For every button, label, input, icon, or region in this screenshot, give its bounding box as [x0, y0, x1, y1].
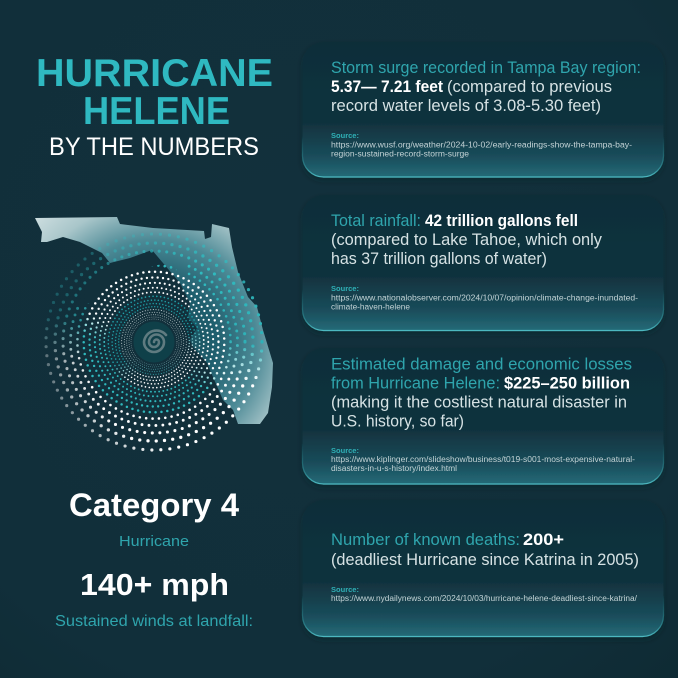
deaths text: (deadliest Hurricane since Katrina in 2005) — [331, 551, 639, 569]
damage text — [331, 356, 632, 430]
damage source — [331, 446, 635, 473]
damage source: https://www.kiplinger.com/slideshow/business/t019-s001-most-expensive-natural- — [331, 455, 635, 464]
stat: wind speed: 140+ mph — [80, 567, 229, 602]
panel background — [302, 348, 664, 484]
deaths source: Source: — [331, 585, 359, 594]
title: BY THE NUMBERS — [49, 133, 259, 161]
panel background — [302, 500, 664, 636]
damage text: U.S. history, so far) — [331, 412, 464, 430]
storm surge text: record water levels of 3.08-5.30 feet) — [331, 97, 601, 115]
panel: damage — [302, 348, 664, 484]
damage text: Estimated damage and economic losses — [331, 356, 632, 374]
damage source: disasters-in-u-s-history/index.html — [331, 464, 457, 473]
Florida silhouette — [35, 217, 273, 424]
deaths text: Number of known deaths: — [331, 531, 520, 549]
storm surge source: https://www.wusf.org/weather/2024-10-02/early-readings-show-the-tampa-bay- — [331, 140, 632, 150]
storm surge text — [331, 59, 641, 115]
stat: category — [69, 487, 239, 550]
map: Florida with hurricane spiral — [35, 217, 273, 450]
spiral outer dots — [46, 234, 262, 450]
storm surge source: Source: — [331, 131, 359, 140]
storm surge text: 5.37— 7.21 feet — [331, 78, 443, 96]
storm surge text: Storm surge recorded in Tampa Bay region: — [331, 59, 641, 77]
panel: rainfall — [302, 195, 664, 330]
rainfall text — [331, 212, 603, 268]
deaths text: 200+ — [523, 531, 564, 549]
panel background — [302, 42, 664, 177]
spiral middle dots — [84, 272, 224, 412]
stat: wind speed: Sustained winds at landfall: — [55, 613, 253, 630]
spiral inner dots — [108, 296, 200, 388]
rainfall source: Source: — [331, 284, 359, 293]
damage text: $225–250 billion — [504, 374, 630, 392]
storm surge source: region-sustained-record-storm-surge — [331, 150, 470, 158]
stat: wind speed — [55, 567, 253, 630]
deaths source — [331, 585, 638, 603]
title: HURRICANE — [36, 52, 273, 95]
title — [36, 52, 273, 161]
spiral eye — [134, 322, 174, 362]
stat: category: Hurricane — [119, 533, 189, 550]
title: HELENE — [83, 90, 230, 133]
storm surge source — [331, 131, 632, 158]
panel: deaths — [302, 500, 664, 636]
rainfall text: 42 trillion gallons fell — [425, 212, 578, 230]
rainfall source: https://www.nationalobserver.com/2024/10/07/opinion/climate-change-inundated- — [331, 294, 638, 302]
deaths source: https://www.nydailynews.com/2024/10/03/hurricane-helene-deadliest-since-katrina/ — [331, 594, 638, 603]
rainfall text: has 37 trillion gallons of water) — [331, 250, 547, 268]
spiral fine dots — [122, 310, 186, 374]
panel: storm surge — [302, 42, 664, 177]
stat: category: Category 4 — [69, 487, 239, 523]
panel background — [302, 195, 664, 330]
damage text: (making it the costliest natural disaster in — [331, 394, 627, 412]
rainfall source: climate-haven-helene — [331, 302, 411, 312]
damage source: Source: — [331, 446, 359, 455]
damage text: from Hurricane Helene: — [331, 374, 500, 392]
deaths text — [331, 531, 639, 569]
storm surge text: (compared to previous — [447, 78, 612, 96]
rainfall source — [331, 284, 638, 312]
rainfall text: Total rainfall: — [331, 212, 421, 230]
rainfall text: (compared to Lake Tahoe, which only — [331, 231, 603, 249]
